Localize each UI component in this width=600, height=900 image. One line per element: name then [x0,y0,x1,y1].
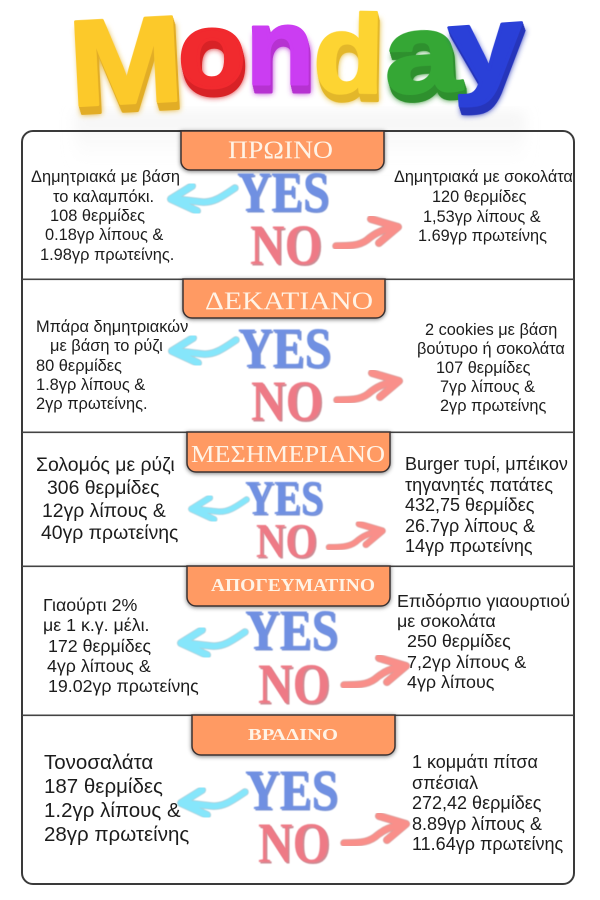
arrow: yes [181,630,245,655]
arrow: no [344,658,406,685]
panel: mid-morning snack [36,279,569,433]
text: yes option: με 1 κ.γ. μέλι. [43,615,150,635]
text: no option: Burger τυρί, μπέικον [405,454,568,474]
text: no option: 26.7γρ λίπους & [405,516,535,536]
text: no option: 4γρ λίπους [407,672,495,692]
text: yes option: Σολομός με ρύζι [36,454,175,476]
text: yes option: Μπάρα δημητριακών [36,318,188,336]
text: no option: 250 θερμίδες [407,631,511,651]
text: no option: 1,53γρ λίπους & [423,208,541,226]
text: no option: 7γρ λίπους & [440,378,535,396]
arrow: yes [181,790,245,815]
panel: afternoon snack [43,566,575,716]
label: NO: NO [250,214,322,277]
heading: ΑΠΟΓΕΥΜΑΤΙΝΟ: ΑΠΟΓΕΥΜΑΤΙΝΟ [211,575,375,595]
text: no option: βούτυρο ή σοκολάτα [417,340,565,358]
arrow: no [336,219,398,246]
text: yes option: 4γρ λίπους & [47,656,151,676]
text: yes option: 1.2γρ λίπους & [44,799,181,822]
text: yes option: 28γρ πρωτείνης [44,823,189,846]
label: NO: NO [251,370,323,433]
text: yes option: 80 θερμίδες [36,357,122,375]
text: no option: 120 θερμίδες [432,188,527,206]
text: no option: 2γρ πρωτείνης [440,397,546,415]
heading: ΜΕΣΗΜΕΡΙΑΝΟ [187,432,390,472]
text: yes option: 19.02γρ πρωτείνης [48,676,199,696]
label: YES: YES [245,470,323,525]
text: no option: Δημητριακά με σοκολάτα [394,168,573,186]
text: yes option: το καλαμπόκι. [53,188,154,206]
heading: ΠΡΩΙΝΟ [181,131,384,170]
text: yes option: με βάση το ρύζι [50,337,163,355]
title: Monday in coloured 3D letters [65,0,528,170]
text: no option: 8.89γρ λίπους & [412,814,542,834]
text: yes option: 0.18γρ λίπους & [45,226,163,244]
label: YES: YES [245,759,338,822]
arrow: no [344,816,406,843]
text: yes option: 1.98γρ πρωτείνης. [40,246,174,264]
text: no option: τηγανητές πατάτες [405,475,553,495]
text: no option: 2 cookies με βάση [425,321,557,339]
text: yes option: 108 θερμίδες [50,207,145,225]
text: yes option: 2γρ πρωτείνης. [36,395,148,413]
heading: ΒΡΑΔΙΝΟ: ΒΡΑΔΙΝΟ [248,725,338,744]
arrow: yes [192,498,247,519]
text: yes option: 187 θερμίδες [44,775,163,798]
text: no option: 107 θερμίδες [436,359,531,377]
text: no option: με σοκολάτα [397,611,496,631]
heading: ΑΠΟΓΕΥΜΑΤΙΝΟ [187,566,390,606]
text: no option: 7,2γρ λίπους & [407,652,526,672]
text: yes option: 40γρ πρωτείνης [41,522,178,544]
text: no option: 1 κομμάτι πίτσα [412,752,538,772]
text: no option: 1.69γρ πρωτείνης [418,227,547,245]
label: NO: NO [258,812,330,875]
text: no option: 432,75 θερμίδες [405,495,535,515]
text: yes option: 12γρ λίπους & [42,500,166,522]
text: no option: 14γρ πρωτείνης [405,536,533,556]
panel: meal chart frame [22,131,574,884]
text: no option: Επιδόρπιο γιαουρτιού [397,591,570,611]
text: yes option: 306 θερμίδες [47,477,159,499]
panel: lunch [36,432,573,568]
text: no option: σπέσιαλ [412,773,478,793]
heading: ΜΕΣΗΜΕΡΙΑΝΟ: ΜΕΣΗΜΕΡΙΑΝΟ [191,442,385,468]
text: no option: 272,42 θερμίδες [412,793,542,813]
arrow: yes [172,338,236,363]
text: yes option: 1.8γρ λίπους & [36,376,145,394]
text: yes option: Δημητριακά με βάση [31,168,180,186]
heading: ΒΡΑΔΙΝΟ [192,715,395,755]
arrow: no [337,373,399,400]
label: NO: NO [258,653,330,716]
arrow: no [329,524,382,547]
label: YES: YES [245,599,338,662]
label: YES: YES [237,161,329,224]
text: no option: 11.64γρ πρωτείνης [412,834,564,854]
panel: dinner [44,715,564,875]
text: yes option: Τονοσαλάτα [44,751,153,774]
heading: ΠΡΩΙΝΟ: ΠΡΩΙΝΟ [228,137,333,164]
label: YES: YES [238,317,331,380]
heading: ΔΕΚΑΤΙΑΝΟ: ΔΕΚΑΤΙΑΝΟ [205,288,373,315]
text: yes option: 172 θερμίδες [48,636,152,656]
panel: breakfast [31,131,577,277]
label: NO: NO [256,513,317,568]
arrow: yes [171,186,235,211]
text: yes option: Γιαούρτι 2% [43,595,138,615]
heading: ΔΕΚΑΤΙΑΝΟ [183,279,385,318]
